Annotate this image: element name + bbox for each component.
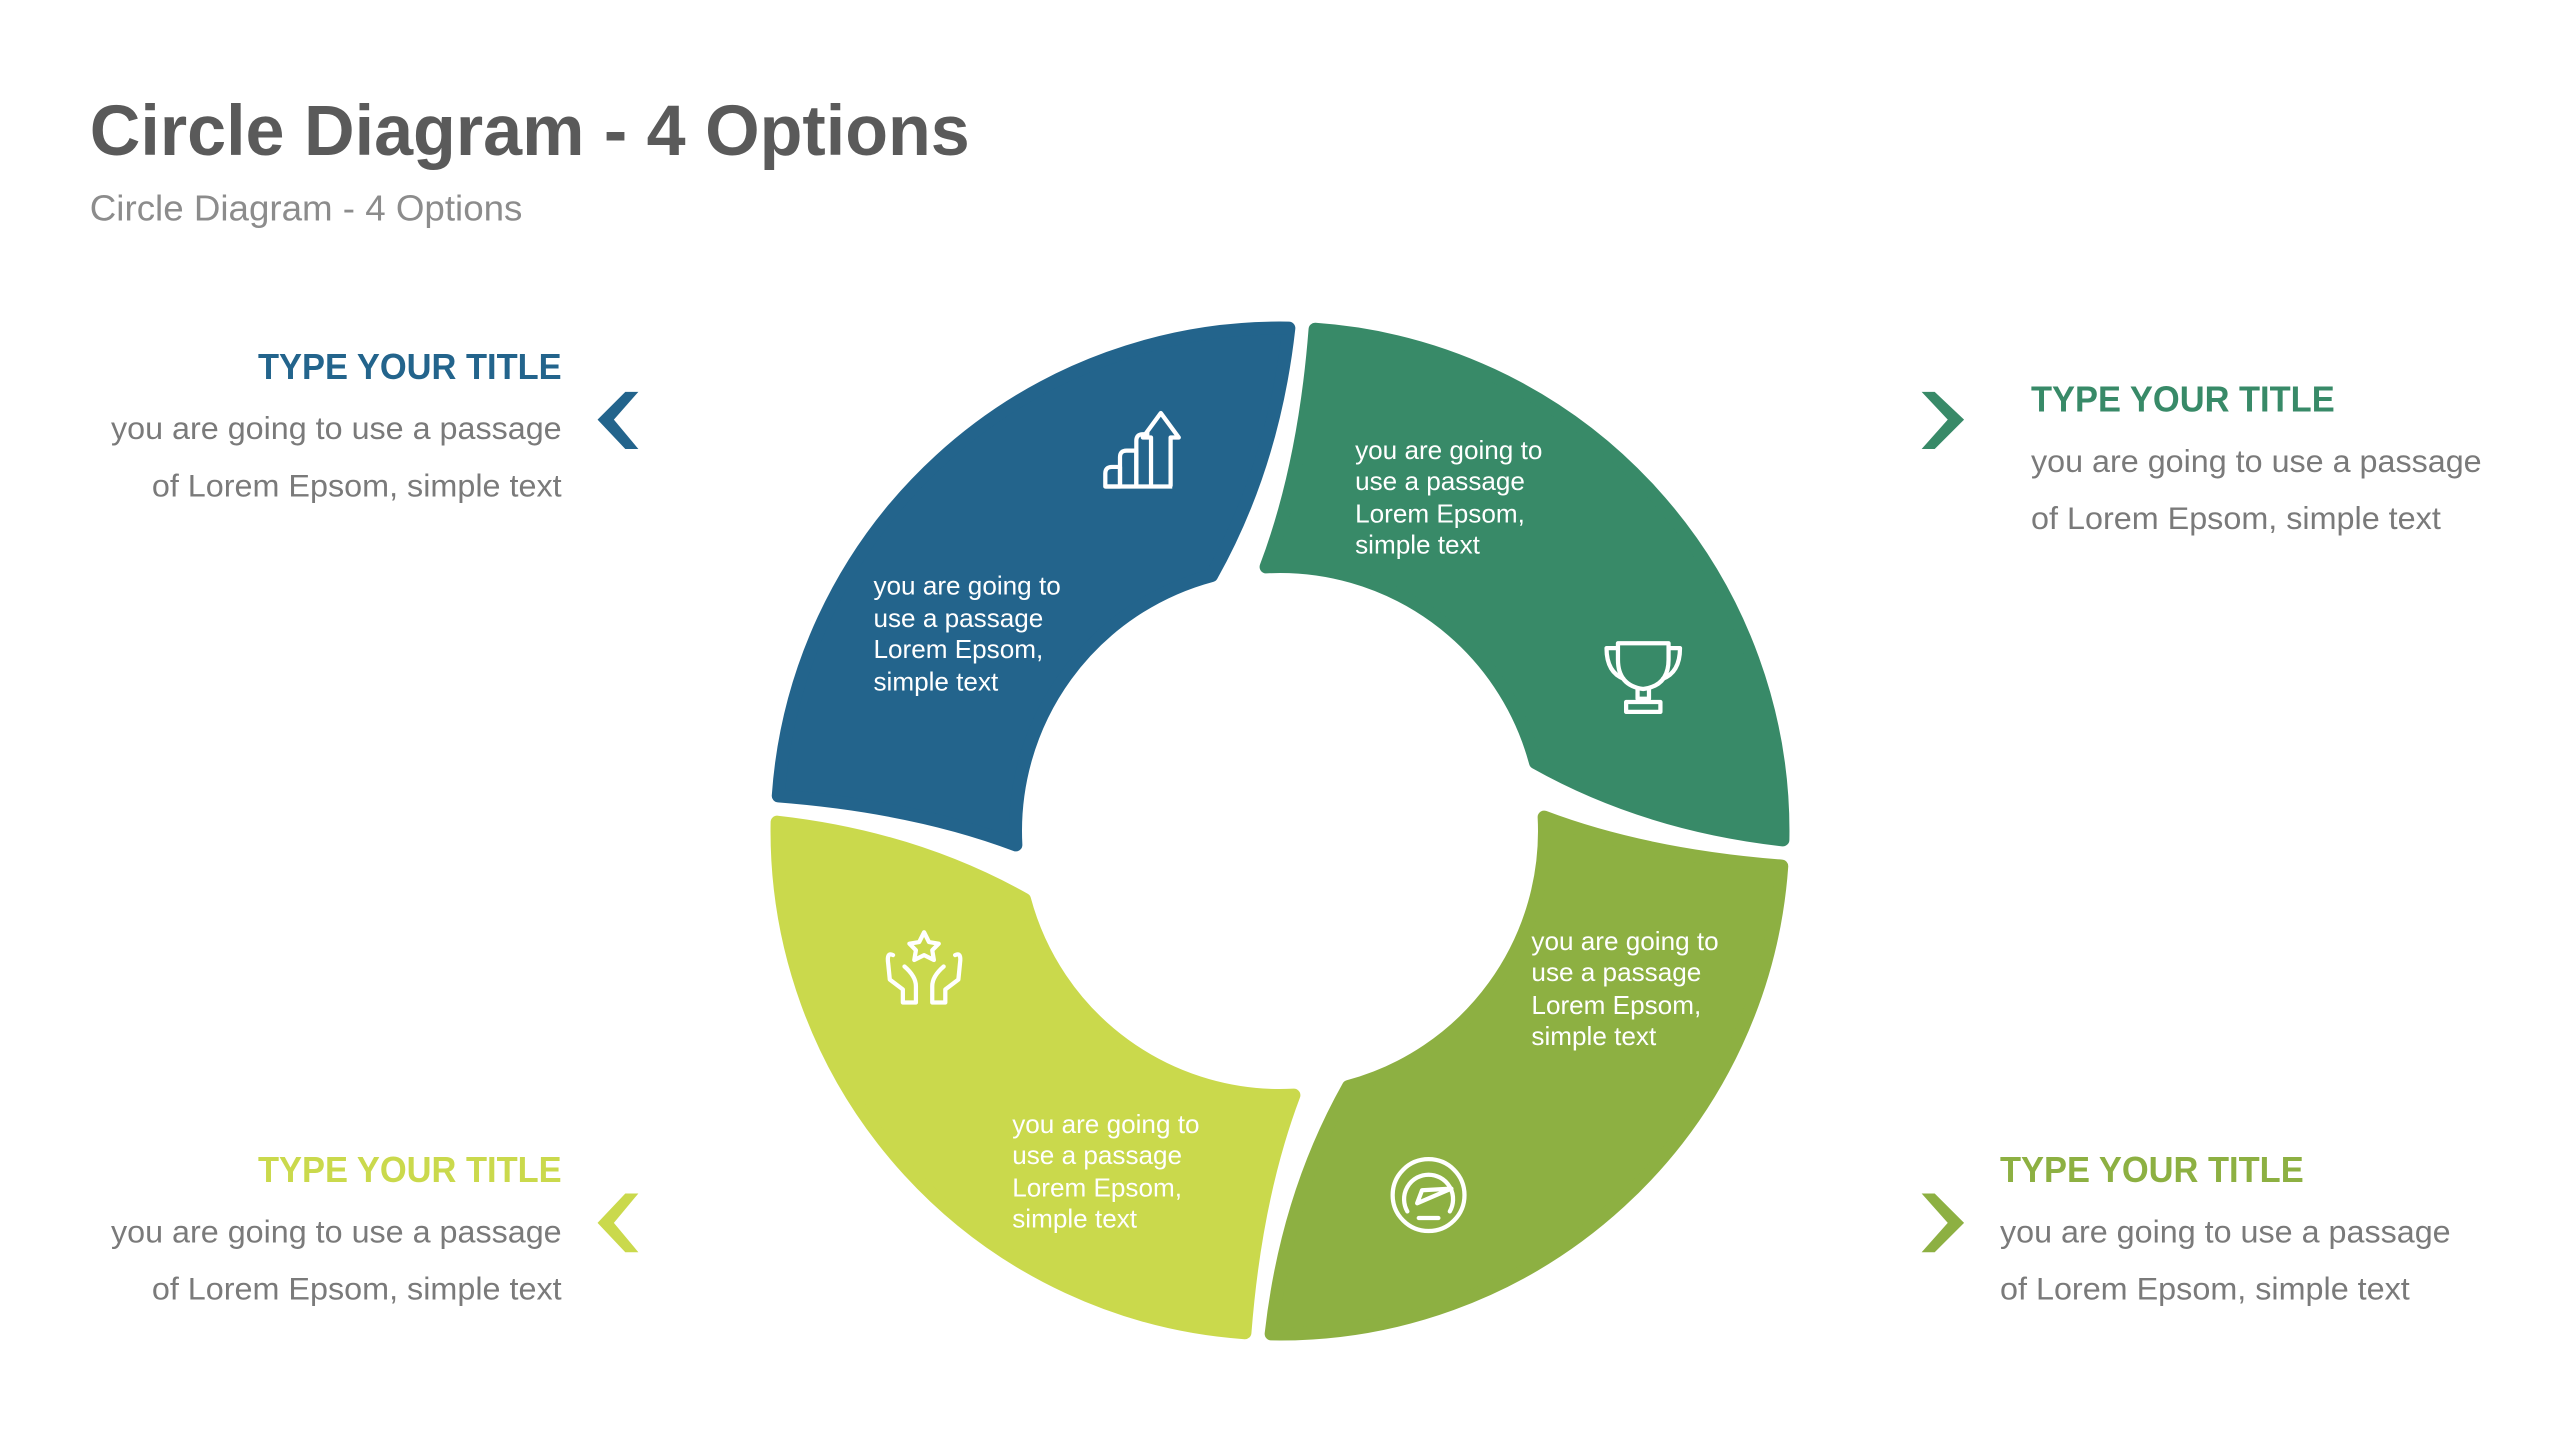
panel: top-right text: of Lorem Epsom, simple text [2031,501,2441,536]
panel: bottom-left text: of Lorem Epsom, simple text [152,1272,562,1307]
circle diagram [777,328,1783,1334]
text: blue segment [873,570,1061,697]
panel: bottom-left text: you are going to use a passage [111,1214,562,1249]
arrow: top-right chevron [1922,392,1964,449]
segment: dark lime [1271,817,1782,1334]
text: light lime segment: you are going to [1012,1109,1200,1139]
segment: green [1266,329,1783,840]
text: dark lime segment [1531,926,1719,1051]
panel: bottom-right text: of Lorem Epsom, simple text [2000,1272,2410,1307]
text: green segment: simple text [1355,529,1481,559]
arrow: top-left chevron [598,392,638,449]
text: light lime segment: Lorem Epsom, [1012,1173,1182,1203]
segment: blue [778,328,1289,845]
text: dark lime segment: simple text [1531,1021,1657,1051]
text: blue segment: use a passage [873,603,1043,633]
icon: gauge [1393,1159,1464,1231]
text: green segment [1355,435,1542,559]
text: green segment: use a passage [1355,466,1525,496]
arrow: bottom-left chevron [598,1193,638,1252]
text: green segment: you are going to [1355,435,1542,465]
panel: top-left text [111,346,562,503]
panel: bottom-right text: TYPE YOUR TITLE [2000,1149,2304,1190]
panel: bottom-right text: you are going to use a passage [2000,1214,2451,1249]
segment: light lime [777,822,1294,1333]
panel: top-left text: TYPE YOUR TITLE [258,346,562,387]
text: green segment: Lorem Epsom, [1355,498,1525,528]
text: light lime segment: use a passage [1012,1140,1182,1170]
panel: top-right text: you are going to use a passage [2031,444,2482,479]
text: dark lime segment: you are going to [1531,926,1719,956]
panel: top-right text: TYPE YOUR TITLE [2031,378,2335,419]
text: blue segment: you are going to [873,570,1061,600]
icon: hands with star [888,932,960,1002]
text: light lime segment: simple text [1012,1204,1138,1234]
panel: top-left text: of Lorem Epsom, simple text [152,468,562,503]
subtitle: Circle Diagram - 4 Options [90,187,522,228]
panel: top-left text: you are going to use a passage [111,411,562,446]
text: blue segment: Lorem Epsom, [873,634,1043,664]
panel: bottom-left text: TYPE YOUR TITLE [258,1149,562,1190]
icon: growth chart [1105,413,1179,487]
panel: bottom-left text [111,1149,562,1307]
panel: top-right text [2031,378,2482,536]
text: light lime segment [1012,1109,1200,1234]
panel: bottom-right text [2000,1149,2451,1307]
icon: trophy [1607,643,1680,712]
title: Circle Diagram - 4 Options [90,91,970,171]
arrow: bottom-right chevron [1922,1193,1964,1252]
text: blue segment: simple text [873,667,999,697]
text: dark lime segment: use a passage [1531,957,1701,987]
text: dark lime segment: Lorem Epsom, [1531,990,1701,1020]
